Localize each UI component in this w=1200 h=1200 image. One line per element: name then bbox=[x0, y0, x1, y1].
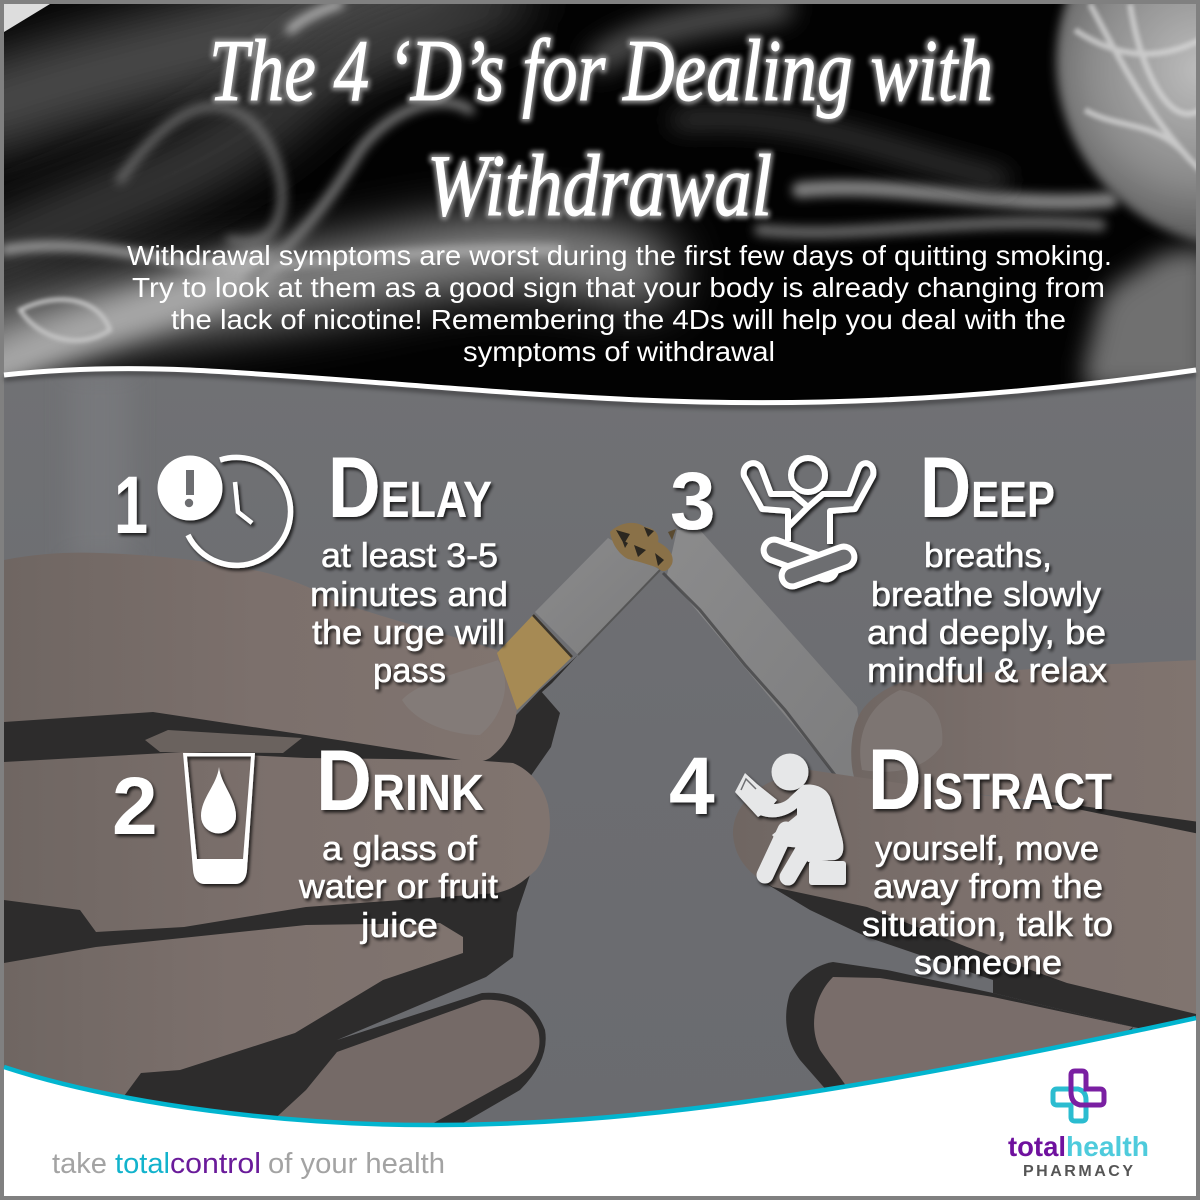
body text: the urge will bbox=[312, 614, 505, 652]
tagline: take bbox=[52, 1148, 107, 1180]
intro paragraph bbox=[127, 240, 1112, 367]
heading: DELAY bbox=[328, 440, 492, 536]
left finger 2 bbox=[4, 752, 550, 932]
footer curve bbox=[4, 1018, 1196, 1125]
right finger 1 nail bbox=[860, 690, 942, 772]
title: The 4 ‘D’s for Dealing with bbox=[209, 23, 993, 120]
icon: person reading on a block bbox=[735, 754, 846, 885]
tagline: control bbox=[170, 1148, 261, 1180]
body text: and deeply, be bbox=[867, 614, 1106, 652]
logo: total health pharmacy bbox=[1008, 1071, 1149, 1180]
panel: step 2 drink bbox=[112, 733, 499, 945]
body text: breaths, bbox=[924, 537, 1052, 575]
right finger 2 bbox=[733, 770, 1200, 1015]
logo: total health pharmacy: health bbox=[1066, 1131, 1149, 1162]
body text: mindful & relax bbox=[867, 652, 1107, 690]
wave divider bbox=[4, 369, 1196, 407]
number 2: 2 bbox=[112, 761, 158, 852]
left finger 1 with cigarette filter bbox=[4, 553, 517, 761]
right finger 1 bbox=[851, 660, 1200, 822]
body text bbox=[298, 830, 499, 945]
intro paragraph: the lack of nicotine! Remembering the 4Ds will help you deal with the bbox=[171, 304, 1066, 335]
body text: juice bbox=[360, 907, 438, 945]
left finger 4 bbox=[268, 1000, 539, 1125]
cigarette filter bbox=[497, 615, 572, 710]
intro paragraph: symptoms of withdrawal bbox=[463, 336, 775, 367]
left finger 3 bbox=[4, 923, 463, 1095]
panel: step 4 distract bbox=[669, 732, 1113, 982]
number 4: 4 bbox=[669, 741, 715, 832]
burnt tobacco bbox=[610, 523, 676, 571]
heading: DISTRACT bbox=[868, 732, 1112, 828]
intro paragraph: Try to look at them as a good sign that your body is already changing from bbox=[132, 272, 1105, 303]
intro paragraph: Withdrawal symptoms are worst during the first few days of quitting smoking. bbox=[127, 240, 1112, 271]
heading: DRINK bbox=[316, 733, 484, 829]
body text: someone bbox=[914, 944, 1062, 982]
body text: situation, talk to bbox=[862, 906, 1113, 944]
logo: total health pharmacy: PHARMACY bbox=[1023, 1163, 1133, 1180]
body text: a glass of bbox=[322, 830, 478, 868]
number 3: 3 bbox=[670, 456, 716, 547]
body text: away from the bbox=[873, 868, 1103, 906]
body text: pass bbox=[373, 652, 446, 690]
body text bbox=[867, 537, 1107, 690]
body text: breathe slowly bbox=[871, 576, 1101, 614]
body text: at least 3-5 bbox=[321, 537, 498, 575]
title: The 4 ‘D’s for Dealing with bbox=[209, 23, 993, 120]
tagline: of your health bbox=[268, 1148, 445, 1180]
right cigarette half bbox=[667, 530, 858, 776]
right finger 3 bbox=[814, 977, 1133, 1084]
title: Withdrawal bbox=[427, 138, 772, 235]
icon: meditating figure bbox=[744, 458, 873, 589]
body text bbox=[862, 830, 1113, 982]
title: Withdrawal bbox=[427, 138, 772, 235]
dark hand shadows left bbox=[4, 690, 560, 1130]
body text: minutes and bbox=[310, 576, 508, 614]
body text: yourself, move bbox=[875, 830, 1099, 868]
tagline bbox=[52, 1148, 445, 1180]
panel: step 1 delay bbox=[114, 440, 508, 690]
icon: interlocked cross bbox=[1053, 1071, 1104, 1121]
body text bbox=[310, 537, 508, 690]
number 1: 1 bbox=[114, 460, 148, 551]
body text: water or fruit bbox=[298, 868, 499, 906]
panel: step 3 deep bbox=[670, 440, 1107, 690]
right fingers dark silhouette bbox=[766, 884, 1196, 1028]
left finger 1 nail bbox=[402, 660, 505, 735]
right finger 3 dark outline bbox=[786, 962, 1133, 1100]
wordmark: total bbox=[1008, 1131, 1066, 1162]
title bbox=[209, 23, 993, 235]
left lighter patch between fingers bbox=[145, 730, 302, 753]
tagline: total bbox=[115, 1148, 170, 1180]
heading: DEEP bbox=[920, 440, 1055, 536]
icon: clock with exclamation bbox=[158, 456, 291, 565]
header panel: black smoke background bbox=[0, 0, 1200, 404]
photo panel: hands breaking a cigarette bbox=[4, 370, 1200, 1130]
left cigarette paper bbox=[535, 538, 660, 655]
icon: glass with water drop bbox=[183, 753, 255, 884]
